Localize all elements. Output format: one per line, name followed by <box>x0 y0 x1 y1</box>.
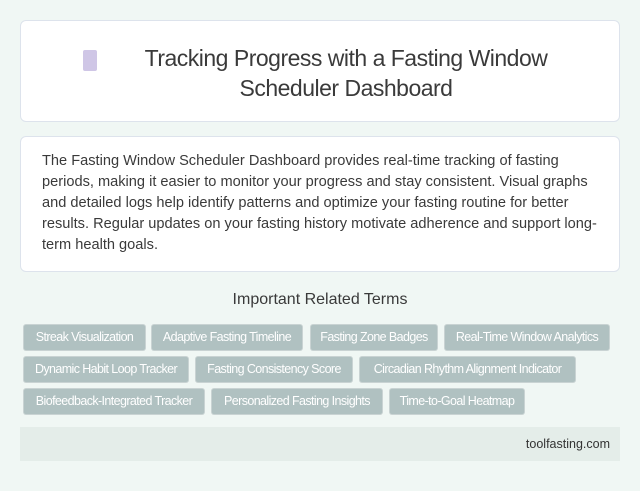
tags: Time-to-Goal Heatmap <box>400 394 514 408</box>
related terms heading: Important Related Terms <box>233 291 407 308</box>
header card <box>20 20 620 122</box>
tags: Biofeedback-Integrated Tracker <box>36 394 192 408</box>
tags: Streak Visualization <box>36 330 133 344</box>
description card <box>20 136 620 272</box>
title: Tracking Progress with a Fasting Window Scheduler Dashboard <box>145 45 547 101</box>
tags: Personalized Fasting Insights <box>224 394 370 408</box>
tags: Real-Time Window Analytics <box>456 330 598 344</box>
footer <box>20 427 620 461</box>
icon: document <box>83 50 97 71</box>
footer: toolfasting.com <box>526 437 610 451</box>
tags: Dynamic Habit Loop Tracker <box>35 362 177 376</box>
tags: Circadian Rhythm Alignment Indicator <box>374 362 561 376</box>
tags: Fasting Consistency Score <box>207 362 341 376</box>
tags: Fasting Zone Badges <box>320 330 428 344</box>
tags: Adaptive Fasting Timeline <box>163 330 291 344</box>
description text: The Fasting Window Scheduler Dashboard provides real-time tracking of fasting periods, making it easier to monitor your progress and stay consistent. Visual graphs and detailed logs help identify patterns and optimize your fasting routine for better results. Regular updates on your fasting history motivate adherence and support long-term health goals. <box>42 153 597 253</box>
